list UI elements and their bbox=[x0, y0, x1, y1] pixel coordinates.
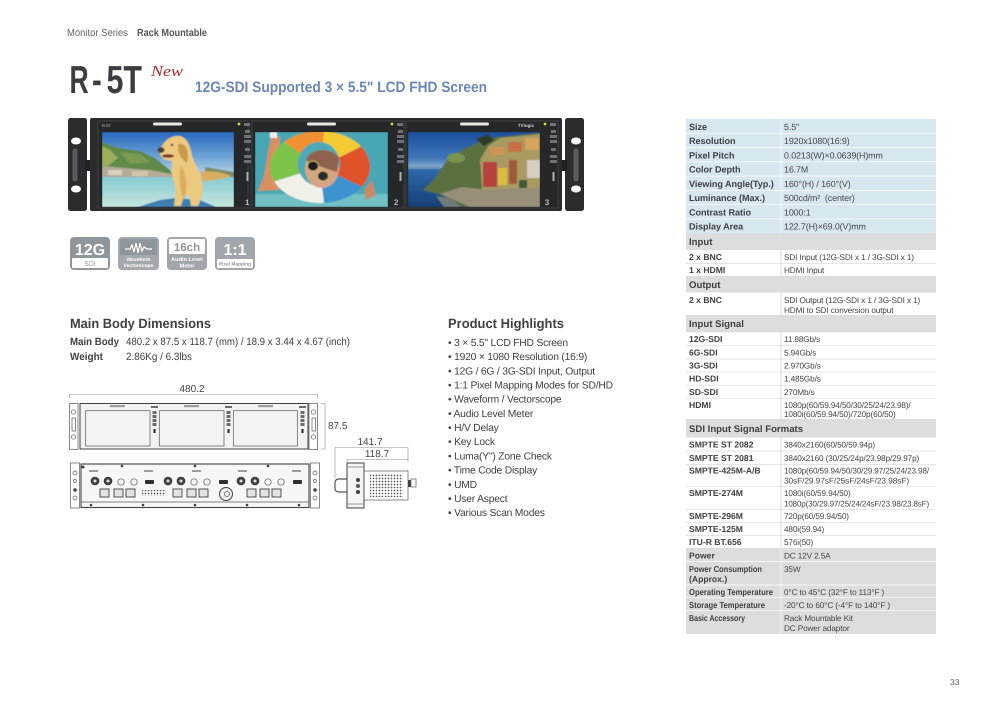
specification table bbox=[686, 119, 936, 634]
list: product highlights: • Various Scan Modes bbox=[448, 508, 545, 519]
table section: input signal: SD-SDI bbox=[689, 387, 718, 397]
breadcrumb: series and category bbox=[67, 28, 207, 39]
table section: SDI input signal formats: SMPTE ST 2081 bbox=[689, 453, 754, 463]
table section: display specs: 5.5" bbox=[784, 122, 799, 132]
table section: SDI input signal formats: 1080p(60/59.94/50/30/29.97/25/24/23.98/ bbox=[784, 466, 930, 476]
heading: product highlights: Product Highlights bbox=[448, 316, 564, 331]
list: product highlights: • Key Lock bbox=[448, 437, 496, 448]
table section: display specs: Size bbox=[689, 122, 707, 132]
table section: power and general: Operating Temperature bbox=[689, 587, 773, 597]
table section: input: HDMI Input bbox=[784, 266, 825, 275]
table section: SDI input signal formats: SMPTE-296M bbox=[689, 511, 743, 521]
screen status bars and side controls: 1 bbox=[245, 198, 250, 207]
table section: power and general: DC 12V 2.5A bbox=[784, 552, 831, 560]
title: product name and tagline: 12G-SDI Supported 3 × 5.5" LCD FHD Screen bbox=[195, 79, 487, 96]
table section: input signal: 5.94Gb/s bbox=[784, 348, 816, 357]
table section: power and general: (Approx.) bbox=[689, 574, 727, 584]
screen 1: golden retriever on a beach bbox=[102, 132, 234, 207]
technical drawing: front view: 87.5 bbox=[328, 421, 348, 432]
screen status bars and side controls bbox=[102, 122, 557, 207]
table section: output: Output bbox=[689, 280, 721, 291]
table section: display specs: Pixel Pitch bbox=[689, 150, 734, 160]
table section: SDI input signal formats: 576i(50) bbox=[784, 538, 813, 547]
table section: power and general: 35W bbox=[784, 565, 801, 574]
table section: input signal: HD-SDI bbox=[689, 374, 719, 384]
badge: 12G SDI bbox=[70, 237, 110, 270]
list: product highlights: • H/V Delay bbox=[448, 423, 500, 434]
rear connector group 2 bbox=[164, 477, 232, 500]
table section: display specs bbox=[686, 119, 936, 233]
table section: power and general: Power bbox=[689, 550, 715, 560]
table section: display specs: Contrast Ratio bbox=[689, 207, 751, 217]
table section: input: SDI Input (12G-SDI x 1 / 3G-SDI x 1) bbox=[784, 253, 914, 262]
table section: power and general: Rack Mountable Kit bbox=[784, 614, 854, 623]
table section: SDI input signal formats: SMPTE ST 2082 bbox=[689, 440, 754, 450]
table section: power and general: Storage Temperature bbox=[689, 600, 765, 610]
table section: input: Input bbox=[689, 237, 713, 248]
dimensions text block bbox=[70, 336, 350, 363]
rear connector group 3 bbox=[237, 477, 302, 497]
table section: power and general: Basic Accessory bbox=[689, 613, 745, 623]
table section: SDI input signal formats: 3840x2160 (30/25/24p/23.98p/29.97p) bbox=[784, 454, 920, 463]
badge: 12G SDI: SDI bbox=[84, 261, 96, 268]
badge: 16ch audio level meter bbox=[167, 237, 207, 270]
table section: SDI input signal formats: SMPTE-274M bbox=[689, 488, 743, 498]
table section: power and general: 0°C to 45°C (32°F to 113°F ) bbox=[784, 588, 885, 597]
technical drawing: side view: 141.7 bbox=[357, 437, 383, 448]
title: product name and tagline bbox=[70, 59, 487, 102]
breadcrumb: series and category: Rack Mountable bbox=[137, 28, 207, 39]
list: product highlights: • Luma(Y") Zone Check bbox=[448, 451, 553, 462]
screen 2: child in a colourful swim ring bbox=[255, 132, 388, 207]
technical drawing: rear view bbox=[70, 463, 320, 508]
right rack ear bbox=[561, 118, 584, 211]
dimensions text block: 480.2 x 87.5 x 118.7 (mm) / 18.9 x 3.44 x 4.67 (inch) bbox=[126, 336, 350, 348]
table section: SDI input signal formats: 30sF/29.97sF/25sF/24sF/23.98sF) bbox=[784, 476, 909, 486]
left rack ear bbox=[68, 118, 91, 211]
table section: input signal: 1080i(60/59.94/50)/720p(60/50) bbox=[784, 410, 896, 419]
table section: input signal: 1.485Gb/s bbox=[784, 375, 821, 384]
product photo: rack monitor with three screens bbox=[68, 118, 584, 211]
table section: SDI input signal formats: ITU-R BT.656 bbox=[689, 537, 742, 547]
table section: power and general bbox=[686, 548, 936, 634]
screen 3: Riomaggiore coastal village bbox=[408, 132, 540, 207]
breadcrumb: series and category: Monitor Series bbox=[67, 28, 128, 39]
table section: display specs: Luminance (Max.) bbox=[689, 193, 765, 203]
screen status bars and side controls: 2 bbox=[394, 198, 399, 207]
list: product highlights: • Audio Level Meter bbox=[448, 409, 534, 420]
table section: input signal: 6G-SDI bbox=[689, 347, 718, 357]
badge: 1:1 pixel mapping: 1:1 bbox=[223, 242, 247, 259]
badge: 16ch audio level meter: Audio Level bbox=[171, 256, 203, 263]
table section: power and general: Power Consumption bbox=[689, 564, 762, 574]
screen status bars and side controls: R-5T bbox=[102, 123, 111, 128]
table section: power and general: -20°C to 60°C (-4°F to 140°F ) bbox=[784, 601, 890, 610]
list: product highlights: • 1920 × 1080 Resolution (16:9) bbox=[448, 352, 587, 363]
table section: display specs: 160°(H) / 160°(V) bbox=[784, 179, 851, 189]
badge: 16ch audio level meter: Meter bbox=[180, 264, 195, 270]
table section: input signal: 12G-SDI bbox=[689, 334, 722, 344]
heading: main body dimensions: Main Body Dimensions bbox=[70, 316, 211, 331]
list: product highlights: • Time Code Display bbox=[448, 466, 538, 477]
dimensions text block: Main Body bbox=[70, 336, 119, 348]
table section: display specs: Resolution bbox=[689, 136, 735, 146]
table section: display specs: Viewing Angle(Typ.) bbox=[689, 179, 774, 189]
list: product highlights bbox=[448, 338, 613, 519]
badge: 16ch audio level meter: 16ch bbox=[174, 242, 200, 254]
title: product name and tagline: - bbox=[92, 59, 102, 102]
table section: input signal: 1080p(60/59.94/50/30/25/24/23.98)/ bbox=[784, 401, 911, 410]
screen status bars and side controls: TVlogic bbox=[518, 123, 535, 128]
table section: output: SDI Output (12G-SDI x 1 / 3G-SDI x 1) bbox=[784, 296, 921, 305]
table section: input signal: HDMI bbox=[689, 400, 711, 410]
monitor chassis bbox=[90, 118, 562, 211]
table section: display specs: 0.0213(W)×0.0639(H)mm bbox=[784, 150, 883, 160]
rear connector group 1 bbox=[91, 477, 166, 497]
table section: SDI input signal formats bbox=[686, 419, 936, 548]
table section: SDI input signal formats: 720p(60/59.94/50) bbox=[784, 512, 849, 521]
table section: input signal bbox=[686, 315, 936, 419]
table section: SDI input signal formats: 1080p(30/29.97/25/24/24sF/23.98/23.8sF) bbox=[784, 500, 929, 508]
table section: input bbox=[686, 233, 936, 276]
dimensions text block: Weight bbox=[70, 351, 103, 363]
title: product name and tagline: New bbox=[150, 64, 183, 80]
screen status bars and side controls: 3 bbox=[545, 198, 550, 207]
list: product highlights: • User Aspect bbox=[448, 494, 508, 505]
badge: 1:1 pixel mapping bbox=[215, 237, 255, 270]
badge: 1:1 pixel mapping: Pixel Mapping bbox=[219, 262, 251, 268]
table section: display specs: 1000:1 bbox=[784, 207, 811, 217]
technical drawing: side view bbox=[335, 437, 416, 508]
table section: display specs: Color Depth bbox=[689, 164, 740, 174]
page number: 33 bbox=[950, 677, 960, 687]
technical drawing: side view: 118.7 bbox=[365, 449, 390, 460]
list: product highlights: • 1:1 Pixel Mapping Modes for SD/HD bbox=[448, 380, 613, 392]
badge: waveform vectorscope: Vectorscope bbox=[124, 263, 154, 269]
table section: display specs: 1920x1080(16:9) bbox=[784, 136, 850, 146]
badge: 12G SDI: 12G bbox=[75, 242, 105, 259]
table section: input signal: 11.88Gb/s bbox=[784, 335, 820, 344]
title: product name and tagline: R bbox=[70, 59, 89, 102]
technical drawing: front view: 480.2 bbox=[179, 384, 205, 395]
table section: display specs: 122.7(H)×69.0(V)mm bbox=[784, 222, 866, 232]
table section: input signal: 270Mb/s bbox=[784, 388, 815, 397]
table section: SDI input signal formats: SDI Input Signal Formats bbox=[689, 424, 803, 435]
badge: waveform vectorscope bbox=[118, 237, 159, 270]
dimensions text block: 2.86Kg / 6.3lbs bbox=[126, 351, 192, 363]
table section: output: HDMI to SDI conversion output bbox=[784, 306, 894, 315]
title: product name and tagline: 5T bbox=[106, 59, 142, 102]
table section: power and general: DC Power adaptor bbox=[784, 624, 850, 633]
table section: display specs: Display Area bbox=[689, 222, 744, 232]
table section: input signal: 3G-SDI bbox=[689, 360, 718, 370]
table section: input: 2 x BNC bbox=[689, 252, 722, 262]
feature badges bbox=[70, 237, 255, 270]
table section: input signal: Input Signal bbox=[689, 319, 744, 330]
list: product highlights: • 3 × 5.5" LCD FHD Screen bbox=[448, 338, 568, 349]
table section: display specs: 500cd/m² (center) bbox=[784, 193, 855, 203]
table section: SDI input signal formats: SMPTE-425M-A/B bbox=[689, 466, 761, 476]
table section: SDI input signal formats: 3840x2160(60/50/59.94p) bbox=[784, 440, 875, 450]
table section: output bbox=[686, 276, 936, 315]
technical drawing: front view bbox=[70, 384, 348, 450]
table section: input: 1 x HDMI bbox=[689, 265, 725, 275]
table section: output: 2 x BNC bbox=[689, 295, 722, 305]
table section: SDI input signal formats: SMPTE-125M bbox=[689, 524, 743, 534]
list: product highlights: • Waveform / Vectorscope bbox=[448, 395, 562, 406]
table section: display specs: 16.7M bbox=[784, 164, 808, 174]
table section: SDI input signal formats: 1080i(60/59.94/50) bbox=[784, 489, 851, 498]
table section: SDI input signal formats: 480i(59.94) bbox=[784, 525, 824, 534]
list: product highlights: • 12G / 6G / 3G-SDI Input, Output bbox=[448, 366, 595, 377]
badge: waveform vectorscope: Waveform bbox=[126, 257, 151, 263]
table section: input signal: 2.970Gb/s bbox=[784, 362, 821, 370]
list: product highlights: • UMD bbox=[448, 480, 477, 491]
